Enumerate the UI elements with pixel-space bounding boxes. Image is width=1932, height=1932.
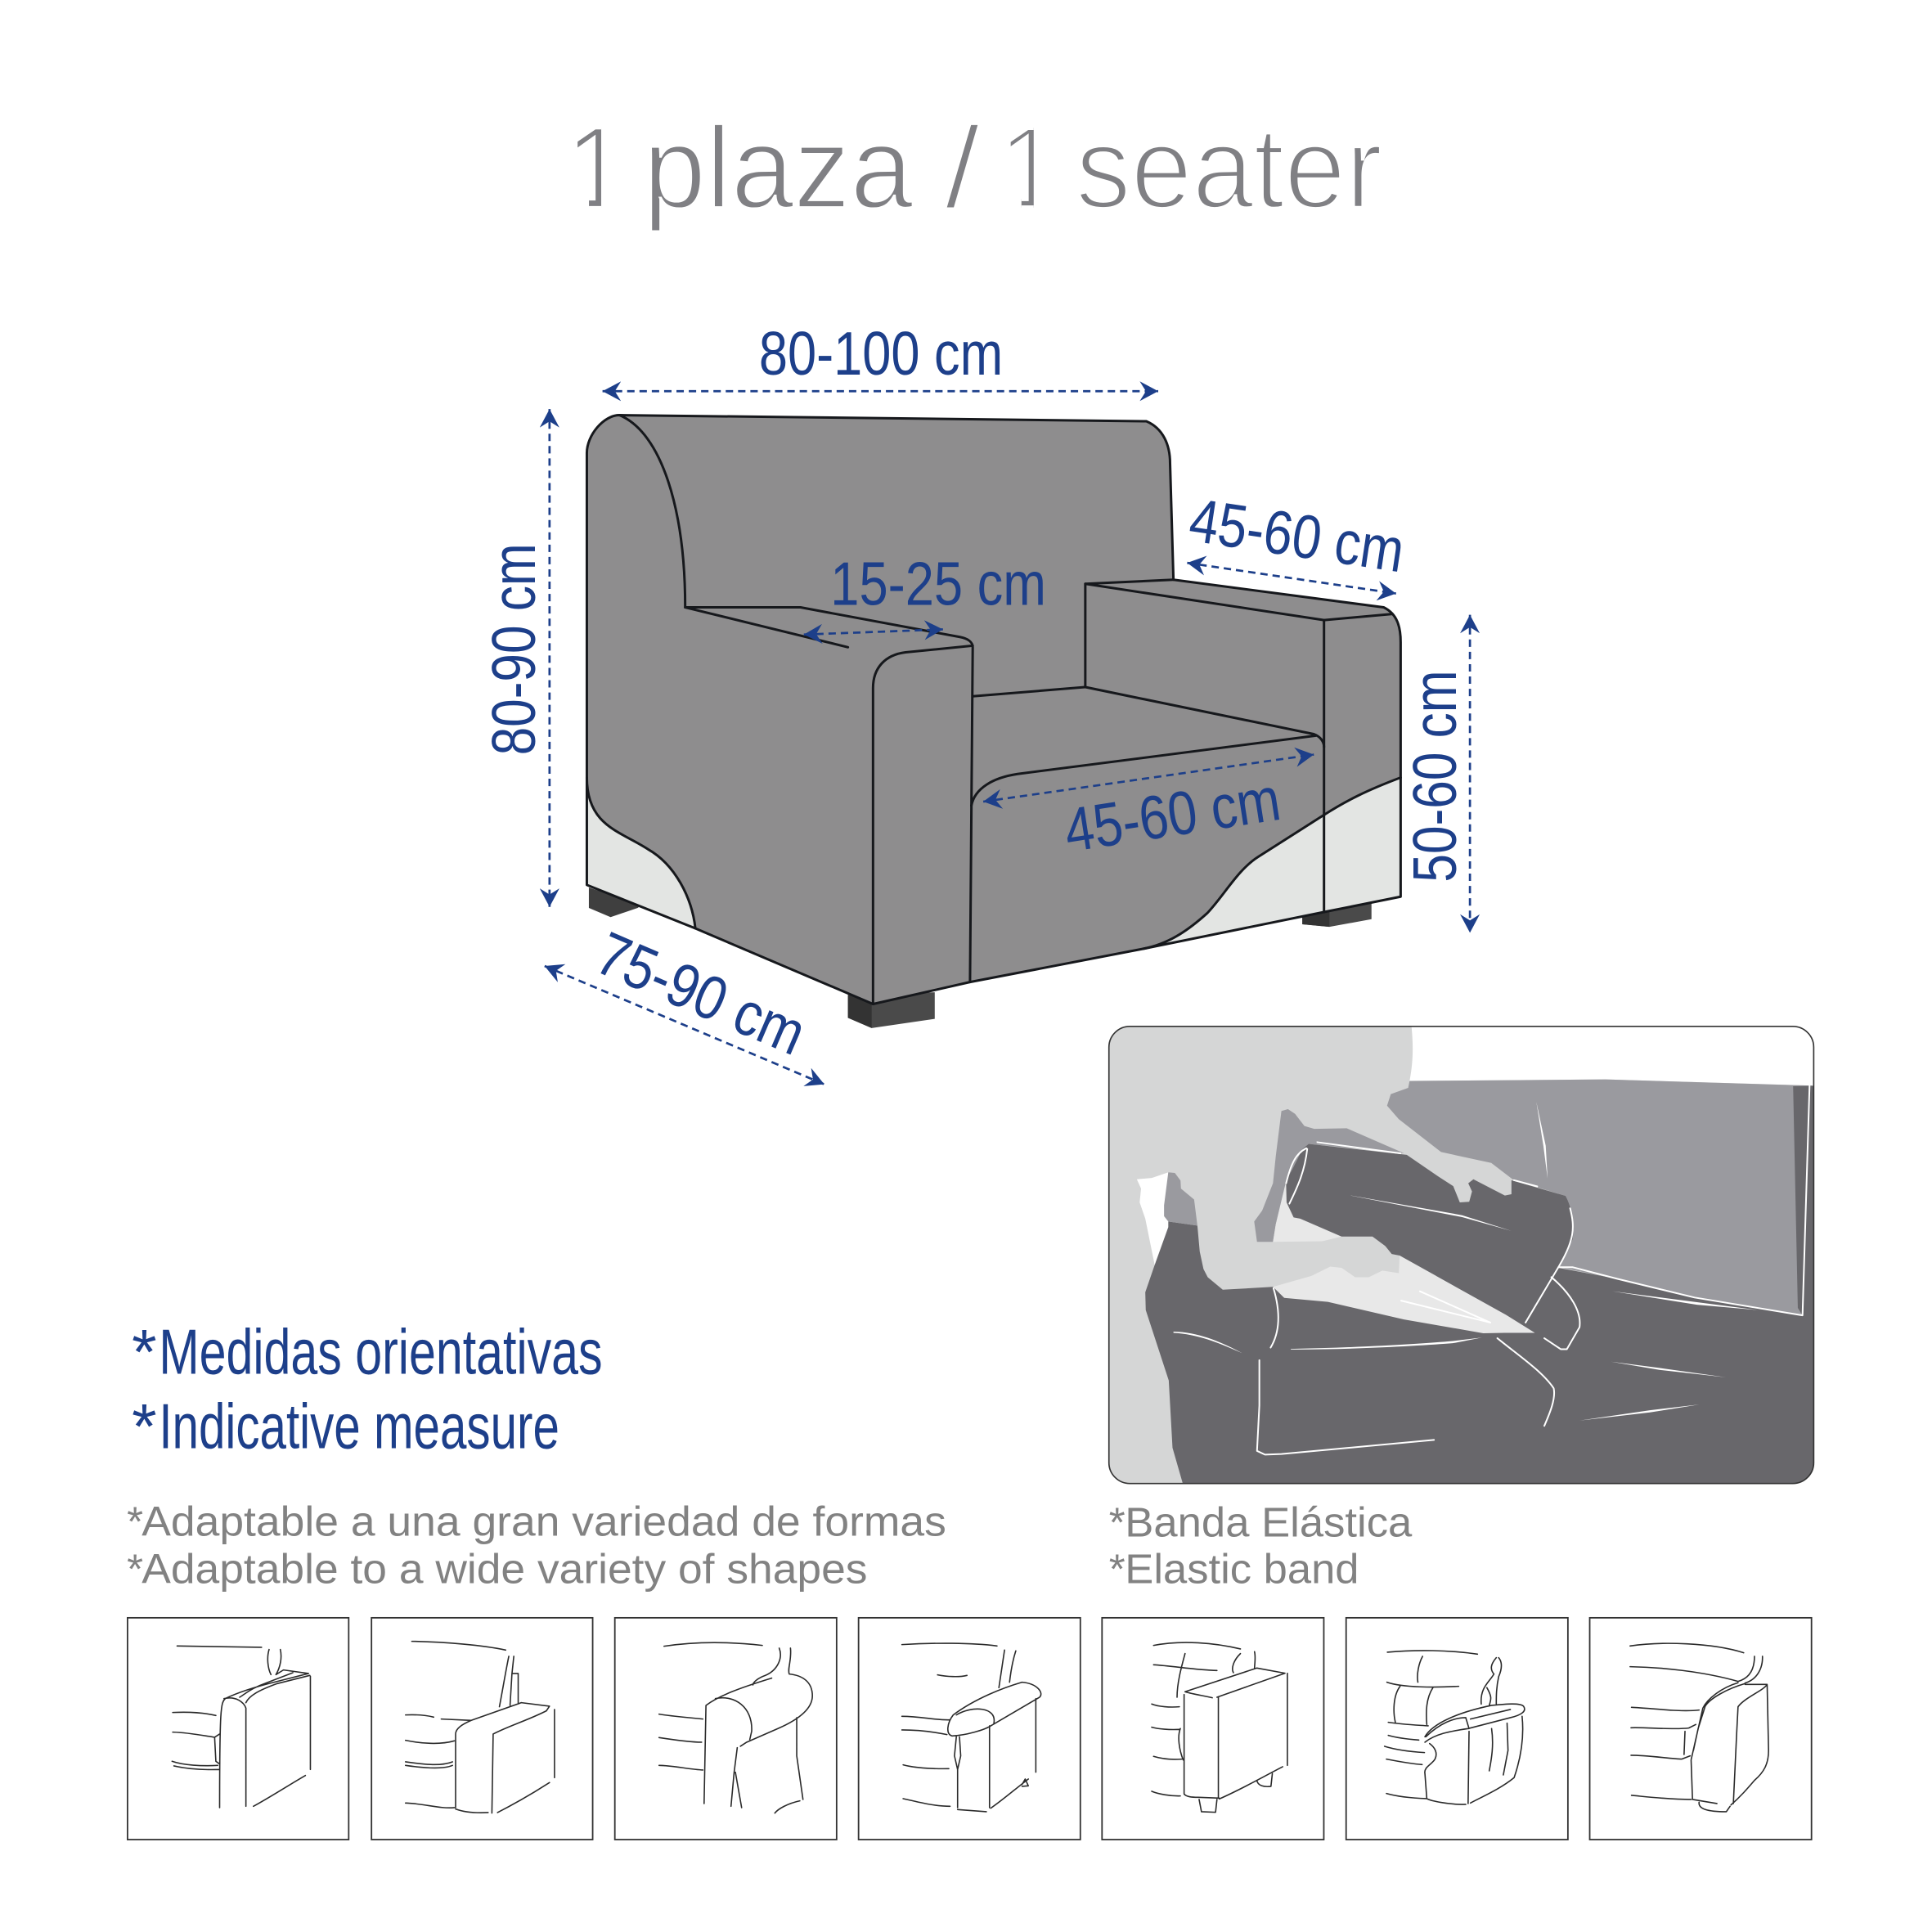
chair outlines [586,416,1400,1004]
title [577,124,1379,231]
sofa back [1387,1080,1812,1315]
note: elastic band: Banda Elástica [1125,1498,1413,1545]
note: elastic band: * [1109,1546,1126,1593]
top right wall [1409,1026,1814,1085]
sofa highlight lines [1174,1085,1809,1454]
dimension arrows [545,391,1470,1085]
back right shadow strip [1793,1085,1815,1319]
dimension labels: 50-60 cm [1400,670,1469,883]
elastic band, upper part [1273,1184,1341,1242]
note: elastic band: * [1109,1498,1126,1545]
chair cover [586,416,1400,1004]
thumbnail: soft contoured arm [1590,1618,1812,1840]
title: 1 [565,104,629,233]
note: adaptable shapes: Adaptable a una gran variedad de formas [142,1498,946,1545]
note: adaptable shapes [127,1498,946,1593]
dimension labels: 45-60 cm [1060,764,1285,865]
thumbnail: rounded arm [615,1618,837,1840]
thumbnail: square arm [128,1618,348,1840]
panel: elastic band illustration [1109,1026,1815,1484]
lifted cushion [1286,1143,1574,1323]
title: / [945,104,980,233]
note: elastic band: Elastic band [1125,1546,1359,1593]
note: elastic band [1109,1498,1413,1593]
far armrest [1164,1172,1197,1225]
dimension labels: 15-25 cm [830,550,1046,618]
dimension labels: 80-90 cm [479,543,548,755]
note: indicative measures: * [132,1316,157,1388]
note: indicative measures [132,1316,603,1462]
sofa body [1145,1221,1815,1484]
dimension labels: 45-60 cm [1185,485,1409,585]
panel border [1109,1027,1813,1484]
dimension labels: 80-100 cm [759,319,1003,388]
note: indicative measures: Indicative measure [159,1391,559,1462]
note: adaptable shapes: Adaptable to a wide variety of shapes [142,1546,867,1593]
dimension labels: 75-90 cm [587,919,815,1068]
note: indicative measures: Medidas orientativas [159,1316,603,1388]
thumbnail: padded recliner arm [1346,1618,1568,1840]
left white gap [1137,1172,1168,1265]
note: adaptable shapes: * [127,1546,143,1593]
thumbnail: box arm on legs [1102,1618,1323,1840]
note: indicative measures: * [132,1391,157,1462]
elastic band, stretched [1273,1256,1535,1333]
chair feet [589,887,1372,1028]
note: adaptable shapes: * [127,1498,143,1545]
thumbnail: roll arm [859,1618,1081,1840]
thumbnail: wide flat arm [371,1618,593,1840]
dimension labels [479,319,1469,1068]
chair base, uncovered part [586,416,1400,1004]
gap behind cushion [1254,1109,1404,1242]
title: seater [1076,104,1382,233]
armchair illustration [586,416,1400,1028]
title: plaza [643,104,913,233]
title: 1 [997,104,1062,233]
